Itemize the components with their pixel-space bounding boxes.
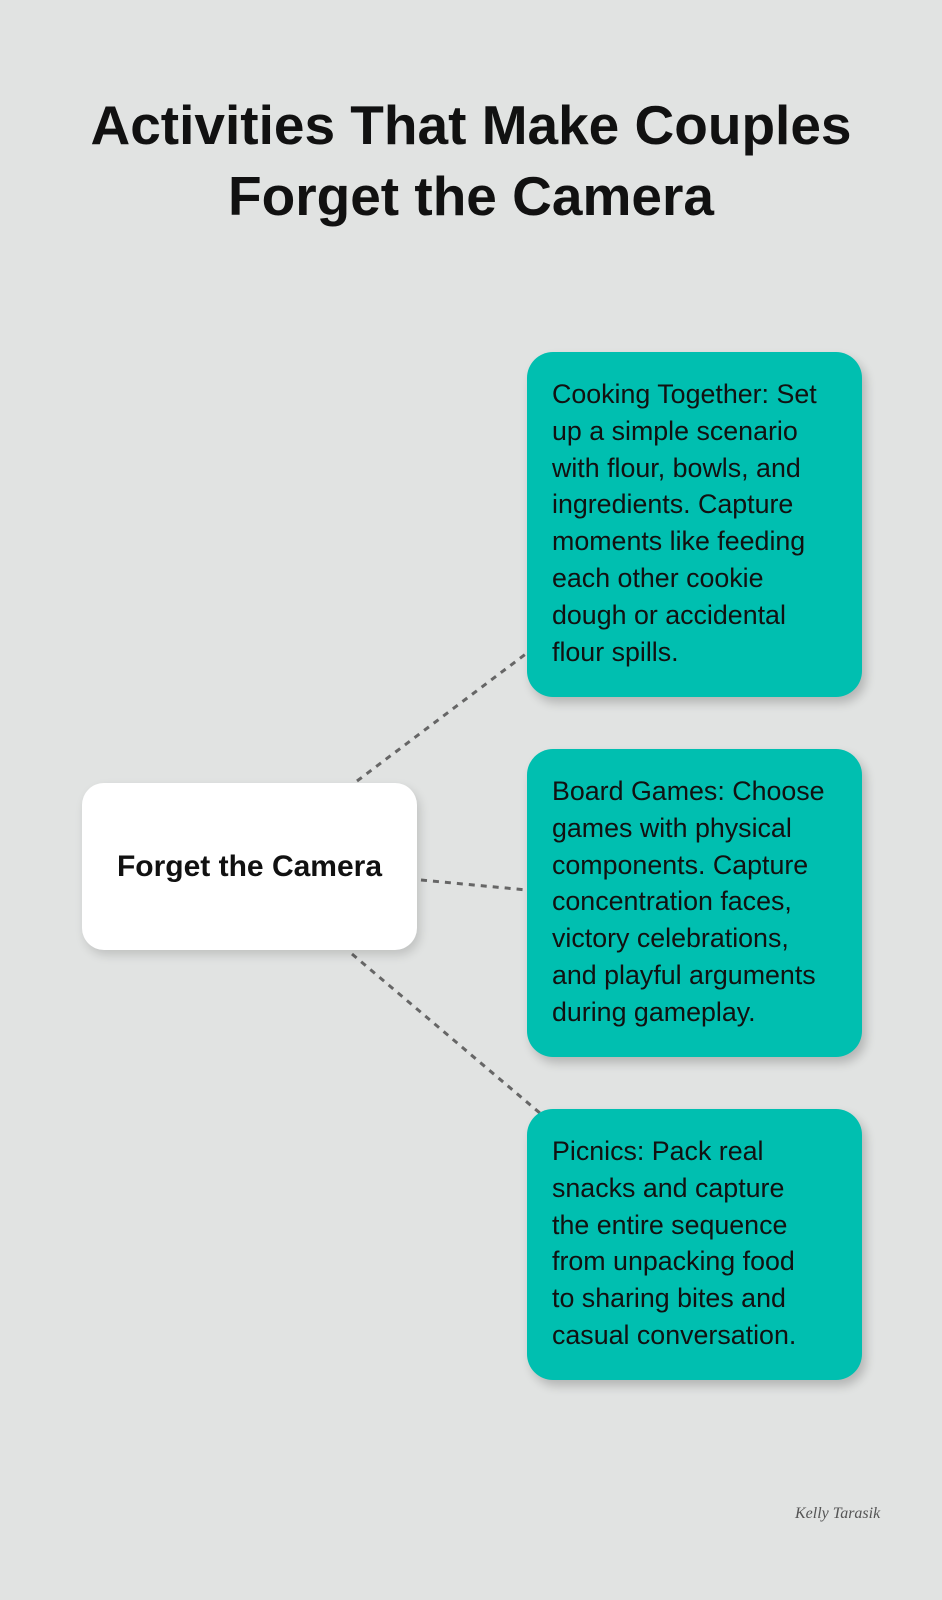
card: cooking: ingredients. Capture (552, 489, 793, 519)
card: board games: victory celebrations, (552, 923, 789, 953)
card: board games: Board Games: Choose (552, 776, 825, 806)
card: board games: during gameplay. (552, 997, 756, 1027)
card: picnics (527, 1109, 862, 1380)
card: cooking: with flour, bowls, and (552, 453, 801, 483)
card: cooking: up a simple scenario (552, 416, 798, 446)
signature: Kelly Tarasik (795, 1505, 880, 1522)
card: board games: games with physical (552, 813, 792, 843)
title: Forget the Camera (228, 165, 714, 227)
card: cooking: Cooking Together: Set (552, 379, 817, 409)
card: cooking: dough or accidental (552, 600, 786, 630)
card: board games (527, 749, 862, 1057)
title: Activities That Make Couples (90, 94, 852, 156)
card: picnics: to sharing bites and (552, 1283, 786, 1313)
card: board games: and playful arguments (552, 960, 816, 990)
card: picnics: casual conversation. (552, 1320, 796, 1350)
card: picnics: from unpacking food (552, 1246, 795, 1276)
card: picnics: Picnics: Pack real (552, 1136, 763, 1166)
card: board games: components. Capture (552, 850, 808, 880)
card: picnics: the entire sequence (552, 1210, 787, 1240)
title (90, 94, 852, 227)
center node (82, 783, 417, 950)
card: cooking: each other cookie (552, 563, 764, 593)
center node: Forget the Camera (117, 850, 382, 882)
card: cooking: moments like feeding (552, 526, 805, 556)
card: cooking (527, 352, 862, 697)
card: picnics: snacks and capture (552, 1173, 784, 1203)
card: board games: concentration faces, (552, 886, 792, 916)
card: cooking: flour spills. (552, 637, 679, 667)
